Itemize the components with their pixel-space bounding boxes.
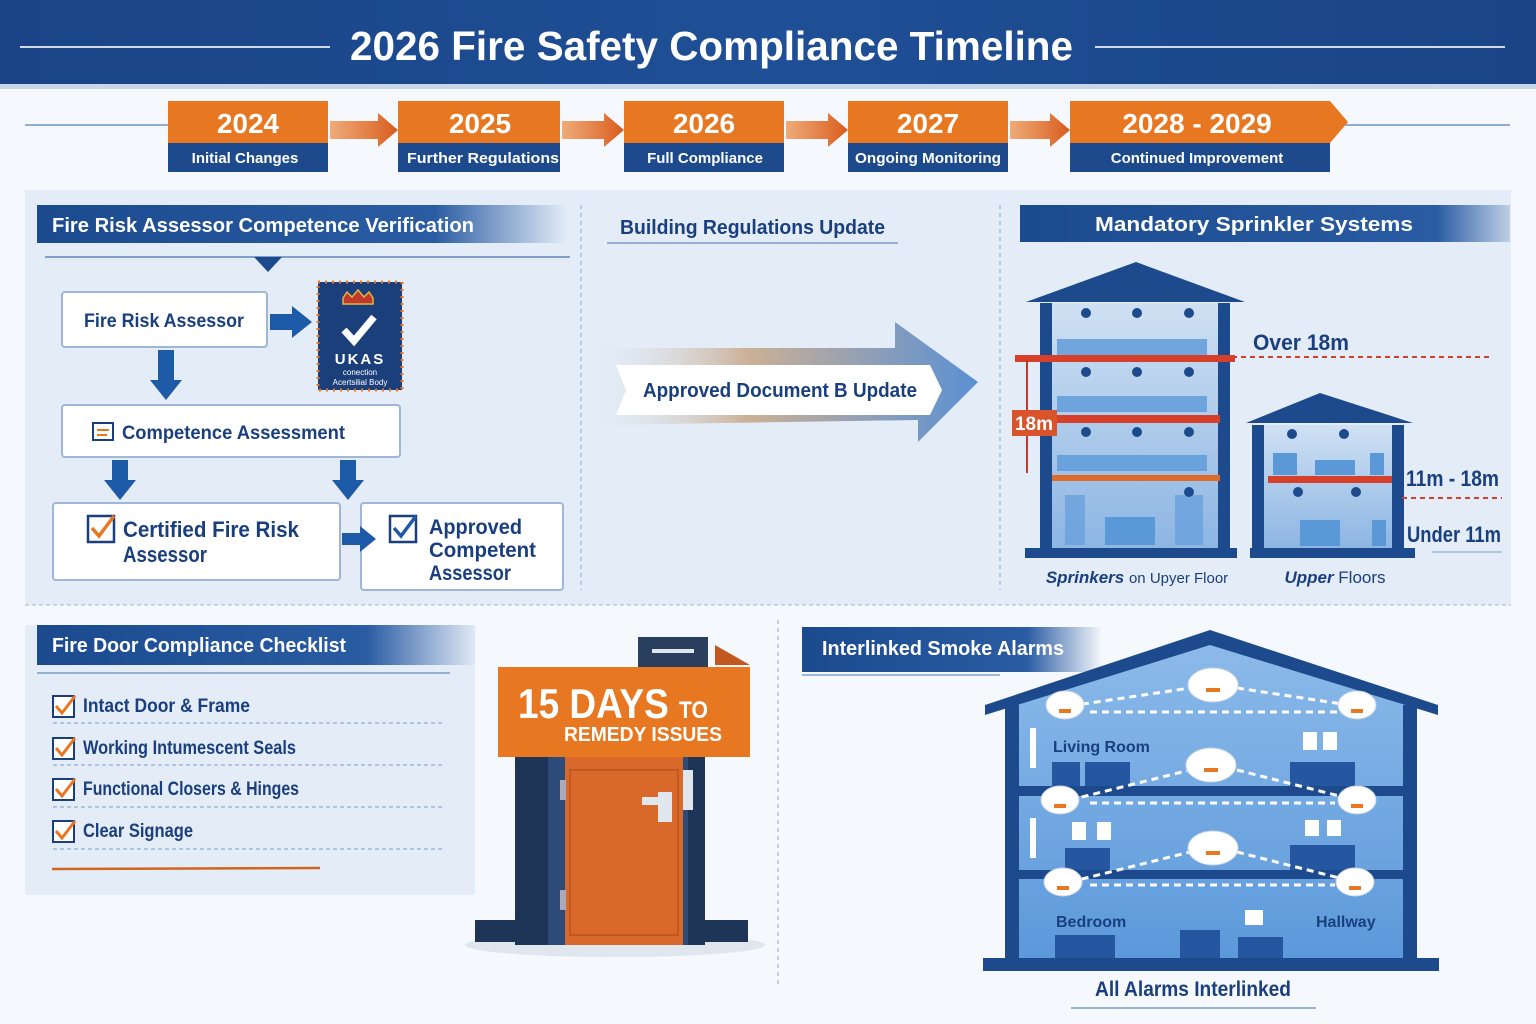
- caption: Upper Floors: [1284, 568, 1386, 587]
- arrow: [786, 113, 848, 147]
- big arrow: [595, 322, 978, 442]
- checklist: Intact Door & Frame: [83, 696, 250, 717]
- panel: building regulations: [595, 217, 978, 442]
- box: fire risk assessor: Fire Risk Assessor: [84, 311, 245, 332]
- milestone 2024: Initial Changes: [192, 150, 298, 167]
- label living room: Living Room: [1053, 739, 1150, 756]
- panel: sprinklers: [1012, 205, 1510, 587]
- short building: [1246, 393, 1415, 558]
- panel: assessor competence: [37, 205, 570, 590]
- heading: [1020, 205, 1510, 242]
- milestone 2025: [398, 101, 560, 172]
- milestone 2026: 2026: [673, 108, 735, 139]
- box: competence assessment: [62, 405, 400, 457]
- milestone 2026: Full Compliance: [647, 150, 763, 167]
- header banner: [0, 0, 1536, 89]
- box: fire risk assessor: [62, 292, 267, 347]
- label over 18m: Over 18m: [1253, 330, 1349, 355]
- label 11-18: 11m - 18m: [1406, 466, 1499, 491]
- box: approved: Approved: [429, 516, 522, 539]
- heading: [37, 625, 477, 665]
- heading: Fire Risk Assessor Competence Verification: [52, 215, 474, 237]
- icon: fire door: [465, 637, 765, 957]
- milestone 2027: [848, 101, 1008, 172]
- arrow: [270, 306, 312, 338]
- box: certified: [53, 503, 340, 580]
- icon: UKAS badge: Acertsilial Body: [333, 378, 387, 387]
- milestone 2028-2029: Continued Improvement: [1111, 150, 1283, 167]
- milestone 2024: [168, 101, 328, 172]
- checklist: Working Intumescent Seals: [83, 738, 296, 759]
- top panel background: [25, 190, 1511, 605]
- heading: [802, 627, 1102, 672]
- arrow: [562, 113, 624, 147]
- heading: Building Regulations Update: [620, 217, 885, 239]
- callout: 15 days: REMEDY ISSUES: [564, 724, 722, 746]
- arrows down: [104, 460, 136, 500]
- box: approved: Assessor: [429, 562, 511, 585]
- caption: Sprinkers on Upyer Floor: [1046, 568, 1228, 587]
- icon: UKAS badge: UKAS: [335, 351, 385, 368]
- arrow: [1010, 113, 1070, 147]
- heading: Interlinked Smoke Alarms: [822, 638, 1064, 660]
- house: [983, 630, 1439, 971]
- label hallway: Hallway: [1316, 914, 1376, 931]
- timeline: [25, 101, 1510, 172]
- box: competence assessment: Competence Assessment: [122, 423, 346, 444]
- label under 11: Under 11m: [1407, 522, 1501, 547]
- label bedroom: Bedroom: [1056, 914, 1126, 931]
- callout: 15 days: 15 DAYS TO: [518, 680, 708, 727]
- box: approved: Competent: [429, 539, 536, 562]
- box: certified: Assessor: [123, 542, 207, 567]
- label 18m: [1012, 410, 1057, 436]
- box: approved: [361, 503, 563, 590]
- title: 2026 Fire Safety Compliance Timeline: [350, 23, 1073, 69]
- milestone 2024: 2024: [217, 108, 280, 139]
- milestone 2026: [624, 101, 784, 172]
- heading: Fire Door Compliance Checklist: [52, 635, 346, 657]
- milestone 2027: 2027: [897, 108, 959, 139]
- milestone 2025: Further Regulations: [407, 150, 559, 167]
- box: certified: Certified Fire Risk: [123, 517, 300, 542]
- checklist: Functional Closers & Hinges: [83, 779, 299, 800]
- arrow right: [342, 526, 376, 552]
- checklist: Clear Signage: [83, 821, 193, 842]
- panel: smoke alarms: [802, 627, 1439, 1008]
- callout: 15 days: [498, 667, 750, 757]
- arrow: [330, 113, 398, 147]
- heading: [37, 205, 567, 243]
- label 18m: 18m: [1015, 414, 1053, 435]
- arrow down: [150, 350, 182, 400]
- caption: All Alarms Interlinked: [1095, 978, 1291, 1001]
- milestone 2028-2029: 2028 - 2029: [1122, 108, 1272, 139]
- panel: fire door checklist: [25, 625, 477, 895]
- milestone 2028-2029: [1070, 101, 1348, 172]
- tall building: [1012, 262, 1245, 558]
- milestone 2027: Ongoing Monitoring: [855, 150, 1001, 167]
- big arrow: Approved Document B Update: [643, 380, 917, 402]
- checklist: [53, 696, 445, 849]
- milestone 2025: 2025: [449, 108, 511, 139]
- icon: UKAS badge: [318, 282, 402, 390]
- icon: UKAS badge: conection: [343, 368, 377, 377]
- heading: Mandatory Sprinkler Systems: [1095, 214, 1413, 236]
